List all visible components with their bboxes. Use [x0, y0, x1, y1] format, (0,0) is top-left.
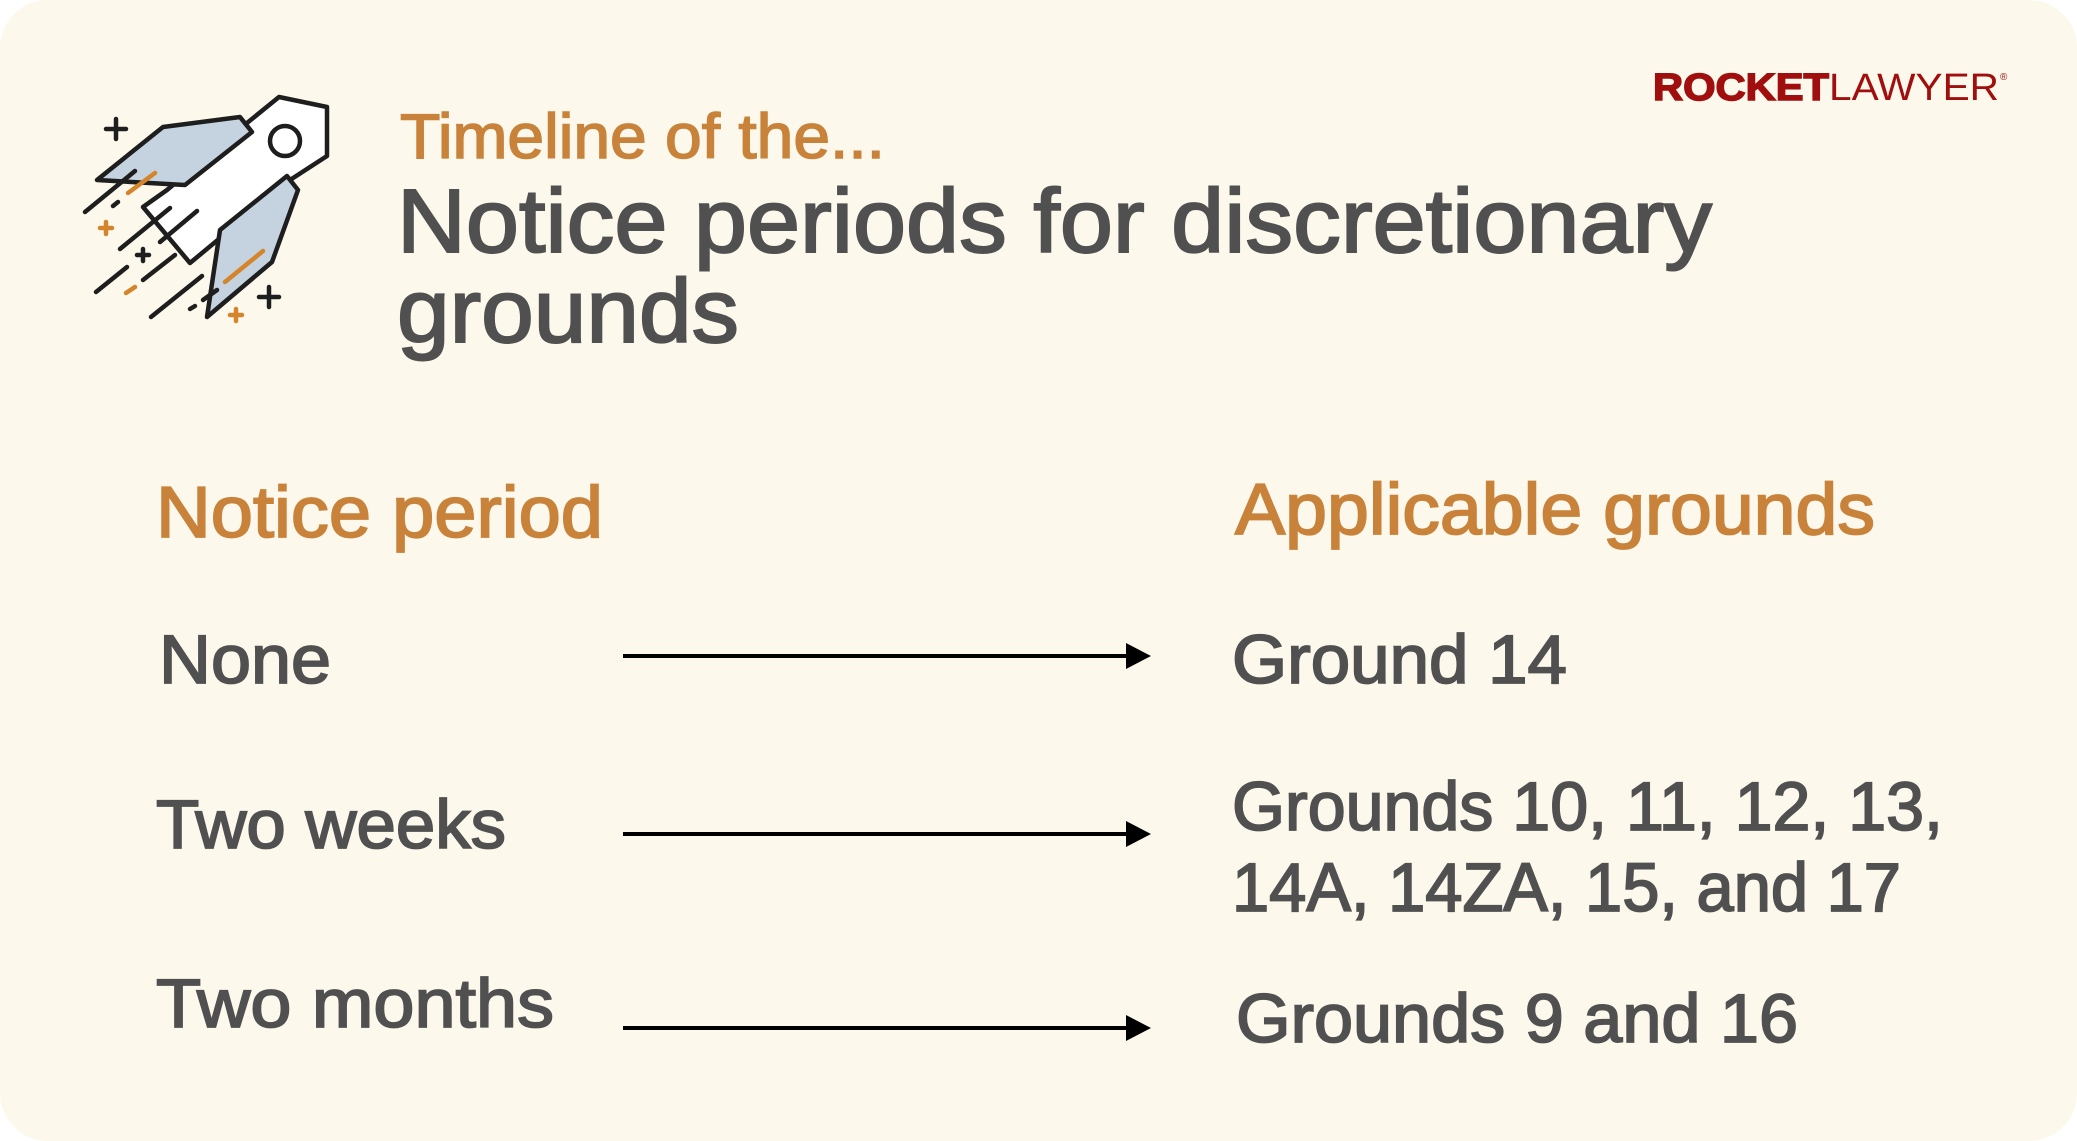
row 1: None: None: [159, 621, 331, 698]
row 3: Two months: [156, 965, 1798, 1057]
arrow 1: [623, 643, 1151, 669]
logo: Rocket Lawyer: ®: [2000, 72, 2008, 83]
title: Notice periods for discretionary: [397, 172, 1712, 272]
title: [397, 172, 1712, 362]
arrow 2: [623, 821, 1151, 847]
row 2: Two weeks: Grounds 10, 11, 12, 13,: [1232, 768, 1943, 845]
icon: rocket: [85, 97, 327, 321]
row 3: Two months: Two months: [156, 965, 554, 1042]
row 1: None: Ground 14: [1232, 621, 1567, 698]
logo: Rocket Lawyer: [1653, 67, 2008, 109]
column heading: applicable grounds: Applicable grounds: [1235, 470, 1875, 550]
row 3: Two months: Grounds 9 and 16: [1236, 980, 1798, 1057]
row 2: Two weeks: [156, 768, 1943, 926]
subtitle: Timeline of the...: [400, 102, 885, 172]
title: grounds: [397, 262, 739, 362]
arrow 3: [623, 1015, 1151, 1041]
row 2: Two weeks: 14A, 14ZA, 15, and 17: [1232, 849, 1901, 926]
logo: Rocket Lawyer: LAWYER: [1829, 67, 1999, 109]
row 2: Two weeks: Two weeks: [156, 786, 506, 863]
column heading: notice period: Notice period: [156, 473, 603, 553]
row 1: None: [159, 621, 1567, 698]
logo: Rocket Lawyer: ROCKET: [1653, 67, 1829, 109]
